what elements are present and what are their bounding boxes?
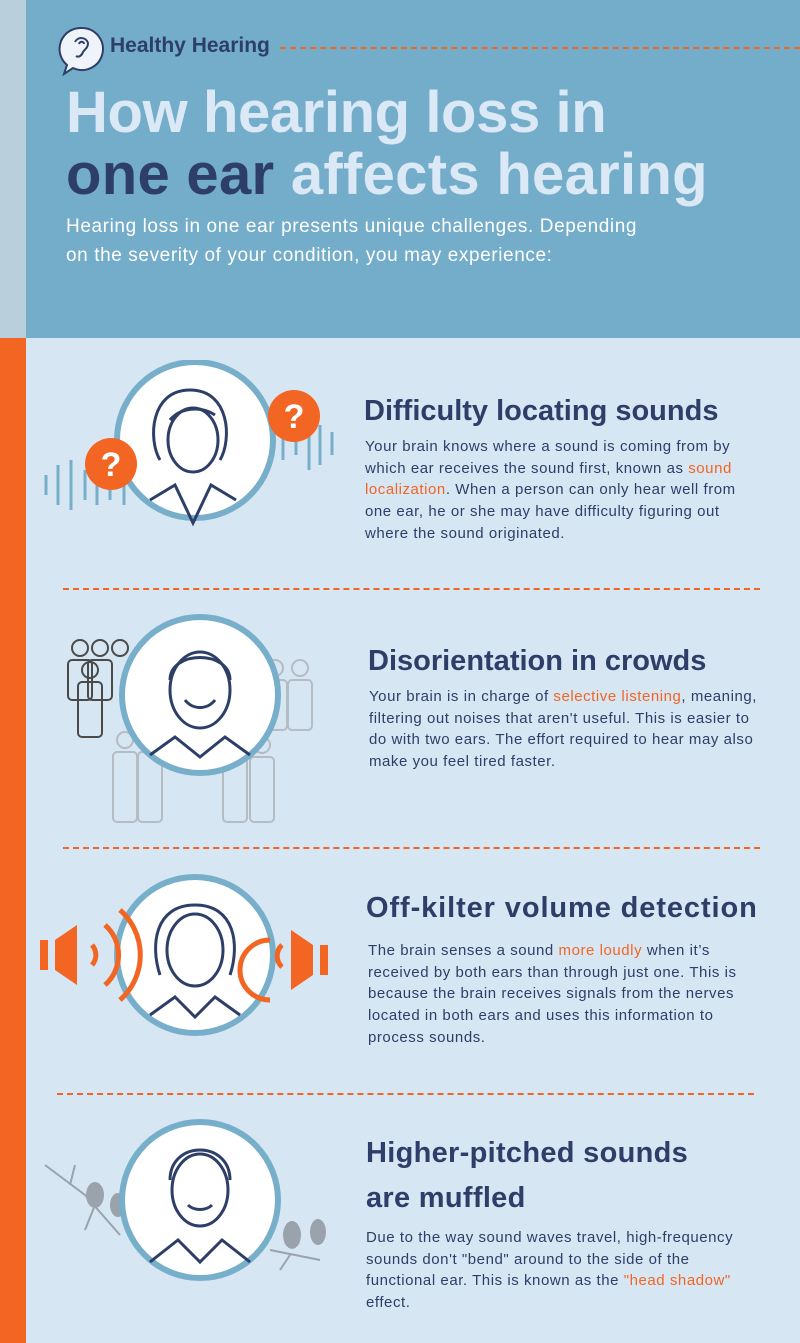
text: pitch: Due to the way sound waves travel, high-frequency: [366, 1229, 733, 1246]
text: pitch: sounds don't "bend" around to the side of the: [366, 1251, 689, 1268]
text: volume: received by both ears than through just one. This is: [368, 964, 737, 981]
text: crowds: [369, 688, 757, 770]
text: locating: one ear, he or she may have difficulty figuring out: [365, 503, 720, 520]
text: volume: located in both ears and uses this information to: [368, 1007, 713, 1024]
icon: face with question marks: [44, 360, 334, 526]
text: crowds: filtering out noises that aren't useful. This is easier to: [369, 710, 750, 727]
text: volume: The brain senses a sound more loudly when it’s: [368, 942, 710, 959]
text: pitch: effect.: [366, 1294, 410, 1311]
text: locating: [365, 438, 736, 542]
heading: pitch: are muffled: [366, 1182, 526, 1214]
title: How hearing loss in: [66, 80, 606, 145]
orange left strip: [0, 338, 26, 1343]
title: one ear affects hearing: [66, 142, 708, 207]
intro text: [66, 216, 637, 266]
text: volume: [368, 942, 737, 1046]
panel: pitch icon: [44, 1119, 326, 1281]
panel: crowds icon: [67, 614, 313, 823]
heading: volume: Off-kilter volume detection: [366, 892, 758, 924]
text: volume: because the brain receives signals from the nerves: [368, 985, 734, 1002]
icon: face with question marks: ?: [284, 398, 304, 436]
intro text: on the severity of your condition, you may experience:: [66, 245, 553, 266]
logo: [58, 27, 270, 76]
icon: face with question marks: ?: [101, 446, 121, 484]
text: locating: where the sound originated.: [365, 525, 565, 542]
header panel: [0, 0, 800, 338]
intro text: Hearing loss in one ear presents unique challenges. Depending: [66, 216, 637, 237]
logo: Healthy Hearing: [110, 34, 270, 57]
text: volume: process sounds.: [368, 1029, 485, 1046]
text: locating: which ear receives the sound first, known as sound: [365, 460, 732, 477]
left strip: [0, 0, 26, 338]
text: pitch: [366, 1229, 733, 1311]
panel: locating sounds: [44, 360, 334, 526]
panel: volume icon: [40, 874, 328, 1036]
text: locating: localization. When a person can only hear well from: [365, 481, 736, 498]
heading: locating: Difficulty locating sounds: [364, 395, 718, 427]
text: pitch: functional ear. This is known as the "head shadow": [366, 1272, 731, 1289]
heading: pitch: [366, 1137, 688, 1214]
heading: crowds: Disorientation in crowds: [368, 645, 706, 677]
text: crowds: Your brain is in charge of selective listening, meaning,: [369, 688, 757, 705]
text: crowds: do with two ears. The effort required to hear may also: [369, 731, 753, 748]
text: locating: Your brain knows where a sound is coming from by: [365, 438, 730, 455]
title: [66, 80, 708, 207]
text: crowds: make you feel tired faster.: [369, 753, 556, 770]
heading: pitch: Higher-pitched sounds: [366, 1137, 688, 1169]
